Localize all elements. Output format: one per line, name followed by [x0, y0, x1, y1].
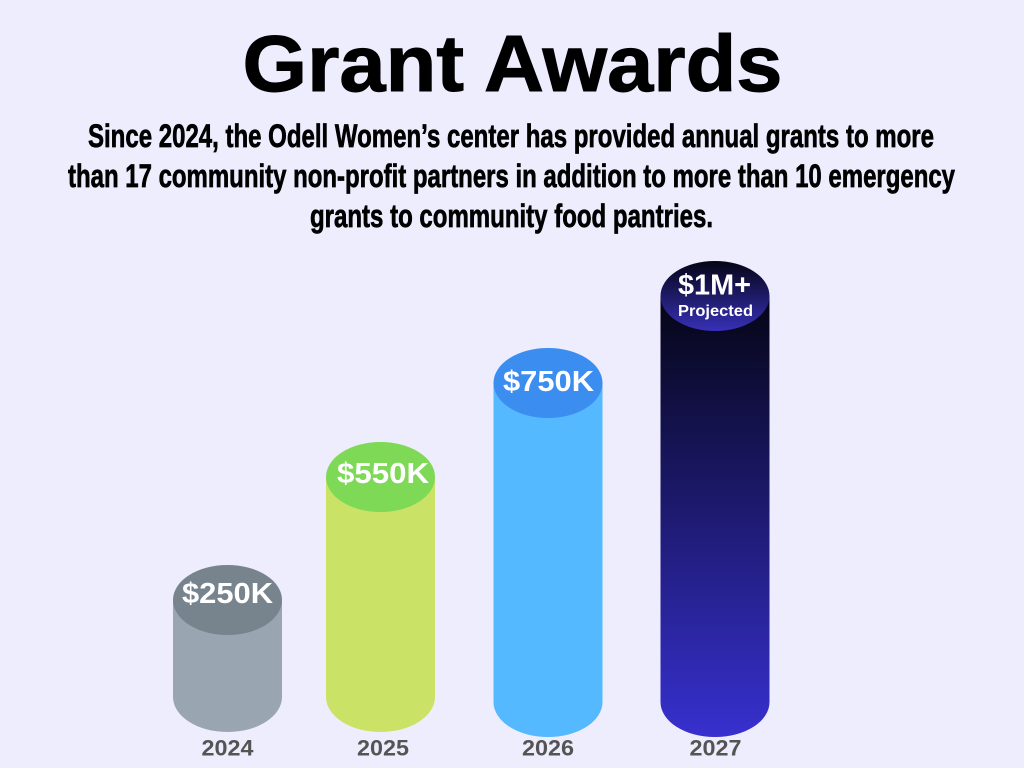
bar: 2027 — [660, 261, 770, 760]
bar: 2027: 2027 — [690, 736, 742, 760]
intro text block — [68, 118, 955, 234]
bar: 2024: $250K — [182, 578, 273, 610]
bar: 2024: 2024 — [202, 736, 254, 760]
bar: 2027: $1M+ — [678, 270, 751, 302]
bar: 2024 — [173, 565, 282, 760]
title: Grant Awards — [242, 19, 782, 108]
intro text block: grants to community food pantries. — [310, 198, 713, 234]
bar: 2026: 2026 — [522, 736, 574, 760]
bar: 2026 — [494, 348, 602, 760]
bar: 2027: Projected — [678, 303, 753, 320]
bar: 2025: $550K — [337, 458, 429, 490]
bar: 2026: $750K — [503, 366, 594, 398]
bar: 2025: 2025 — [357, 736, 409, 760]
bar: 2025 — [326, 442, 435, 760]
